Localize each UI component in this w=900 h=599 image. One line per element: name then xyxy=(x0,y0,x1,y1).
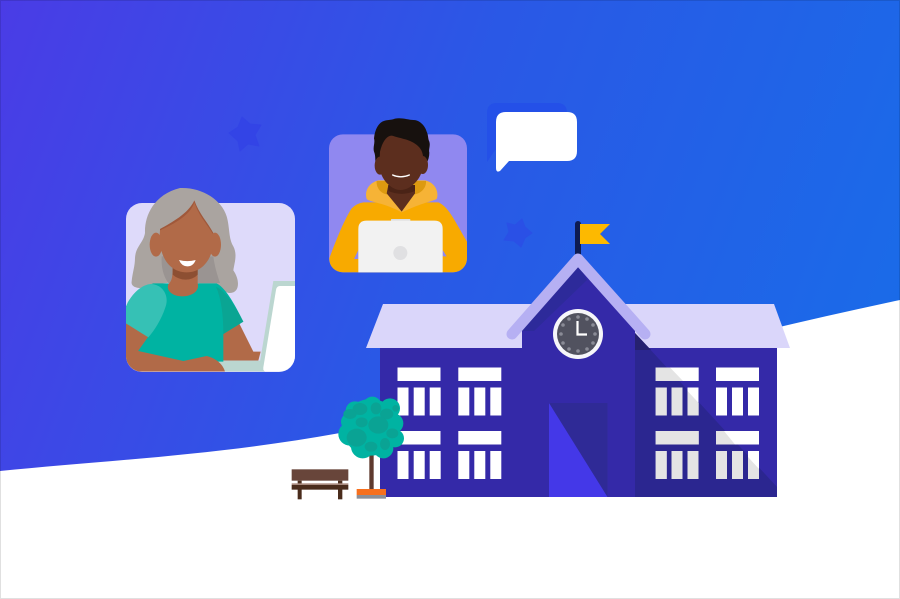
card background xyxy=(126,203,295,372)
smile xyxy=(393,175,409,177)
windows right xyxy=(656,368,759,479)
face xyxy=(160,202,214,272)
laptop logo xyxy=(393,246,407,260)
hair xyxy=(132,188,238,293)
hood inner xyxy=(377,181,426,194)
main wall xyxy=(380,348,777,497)
arm left xyxy=(126,323,153,372)
star left xyxy=(229,117,261,151)
card background xyxy=(329,134,467,272)
school building xyxy=(366,221,790,497)
bench posts xyxy=(298,481,302,499)
planter xyxy=(357,489,386,495)
tree xyxy=(338,397,404,499)
clock ticks xyxy=(559,315,597,353)
clock hands xyxy=(578,321,587,334)
face xyxy=(379,136,423,190)
neck shadow xyxy=(173,266,198,280)
wing shadow xyxy=(635,333,777,497)
head xyxy=(150,200,221,296)
hair under shade xyxy=(162,256,220,283)
person: woman with laptop xyxy=(126,188,295,372)
flag xyxy=(580,224,610,244)
sleeve highlight xyxy=(126,284,167,337)
head xyxy=(374,118,430,190)
arm gaps xyxy=(354,250,447,259)
foliage xyxy=(338,397,404,458)
arm right xyxy=(223,324,261,361)
person: man in yellow hoodie xyxy=(329,118,467,272)
foliage shades xyxy=(343,402,399,452)
shirt shade xyxy=(216,287,243,334)
flag pole xyxy=(575,221,581,257)
bubble shadow xyxy=(487,103,567,162)
gable trim xyxy=(512,259,645,334)
window shading xyxy=(656,368,759,479)
hood xyxy=(366,180,437,212)
star right xyxy=(504,219,532,247)
wing roof xyxy=(366,304,790,348)
bench seat xyxy=(292,483,348,485)
trunk xyxy=(369,455,374,490)
central gable xyxy=(522,264,635,497)
laptop screen xyxy=(263,286,295,372)
bench xyxy=(292,469,348,499)
laptop base xyxy=(218,360,260,372)
laptop lid xyxy=(258,281,295,372)
neck xyxy=(387,185,415,212)
ears xyxy=(150,233,162,257)
windows left xyxy=(398,368,501,479)
ears xyxy=(375,157,385,175)
neck xyxy=(168,266,198,296)
hairline shade xyxy=(160,200,213,236)
bench back xyxy=(292,469,348,481)
hoodie body xyxy=(329,202,467,272)
gable shade xyxy=(522,264,587,331)
speech bubble xyxy=(487,103,577,172)
laptop lid xyxy=(358,221,443,272)
shirt xyxy=(126,283,243,362)
laptop xyxy=(358,219,443,272)
bubble body xyxy=(496,112,577,172)
forearm xyxy=(126,351,225,372)
hair xyxy=(374,118,430,165)
clock xyxy=(553,309,603,359)
neck shadow xyxy=(388,185,415,194)
laptop hinge xyxy=(391,219,410,222)
door xyxy=(549,403,608,497)
smile xyxy=(179,260,196,266)
